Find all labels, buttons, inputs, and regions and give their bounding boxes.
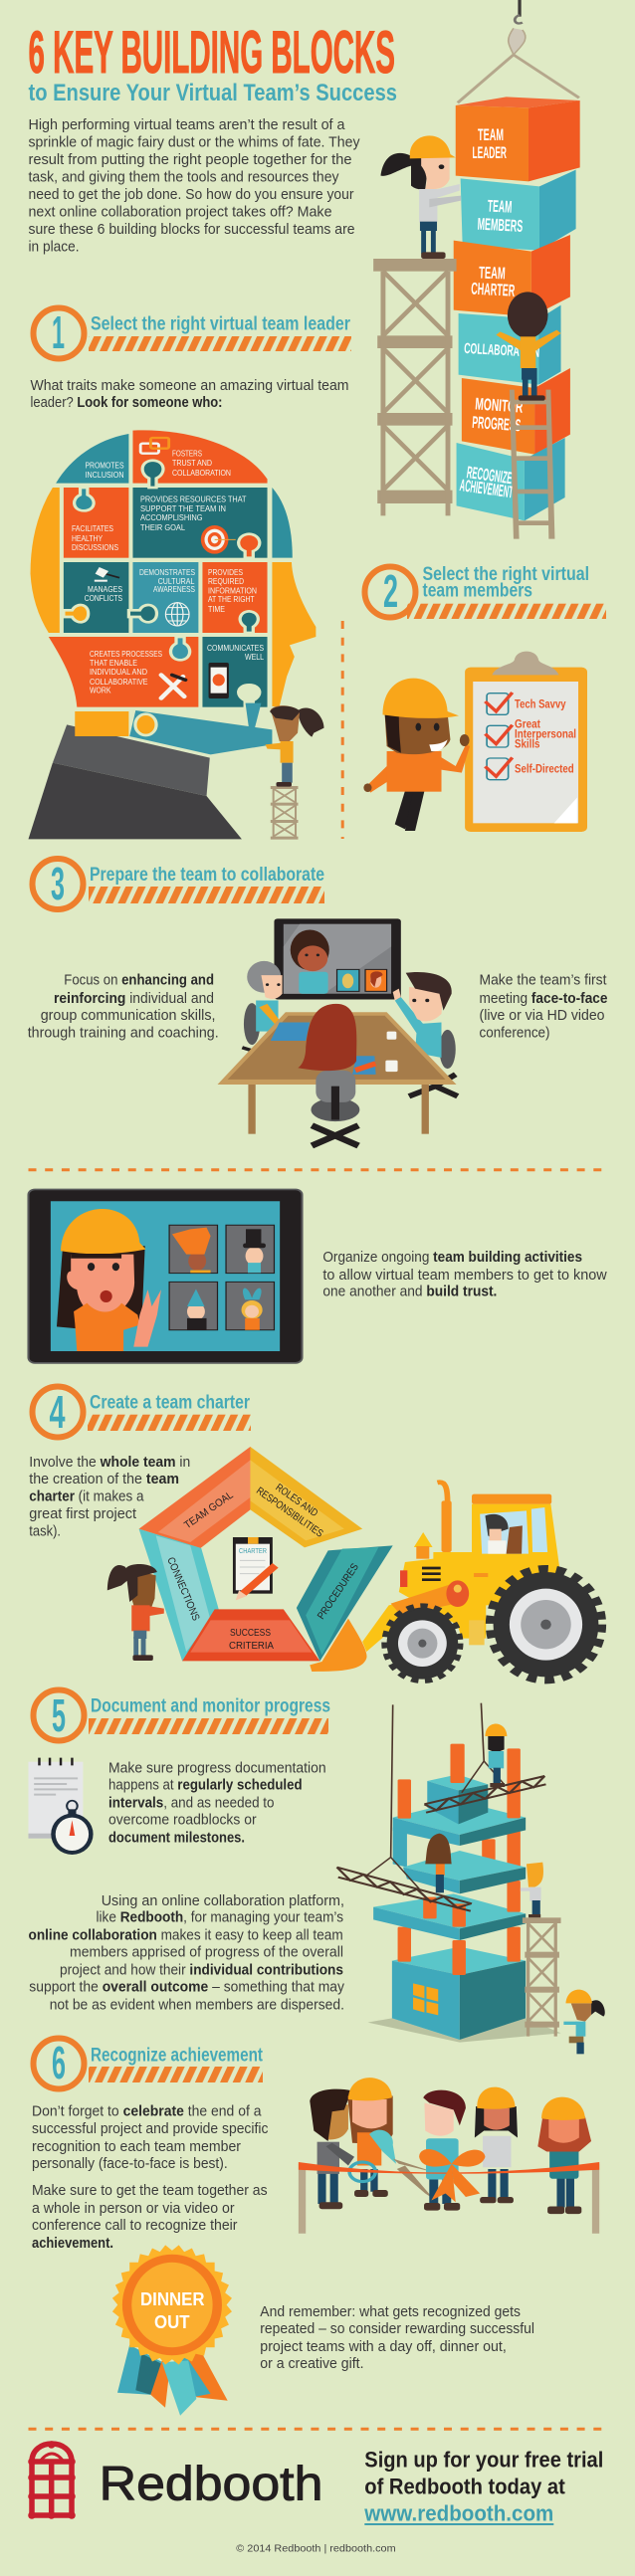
head puzzle labels: FOSTERS — [172, 450, 202, 459]
section 6 text: achievement. — [32, 2236, 113, 2252]
thumbnail: jester — [169, 1225, 217, 1274]
section 3 left text: reinforcing individual and — [54, 991, 214, 1007]
block labels: CHARTER — [471, 280, 516, 300]
call to action: www.redbooth.com — [363, 2501, 553, 2526]
head puzzle labels: FACILITATES — [72, 524, 113, 533]
intro paragraph: High performing virtual teams aren’t the result of a — [28, 117, 345, 133]
puzzle piece: yellow face — [272, 562, 316, 706]
team building text — [322, 1250, 607, 1300]
puzzle piece: facilitates — [64, 488, 128, 558]
section 5 heading — [34, 1689, 330, 1741]
section 3 right text: conference) — [480, 1026, 549, 1042]
subtitle: to Ensure Your Virtual Team’s Success — [28, 80, 397, 106]
pentagon labels: SUCCESS — [230, 1627, 271, 1639]
meeting scene — [217, 918, 458, 1145]
section 6 heading: Recognize achievement — [91, 2046, 264, 2066]
section 1 heading: Select the right virtual team leader — [91, 314, 350, 335]
section 5 text two: support the overall outcome – something that may — [29, 1980, 345, 1996]
head puzzle labels: INFORMATION — [208, 586, 257, 595]
segment: success criteria — [182, 1609, 319, 1661]
icon: dinner out medal: OUT — [154, 2312, 189, 2332]
section 3 right text: (live or via HD video — [480, 1008, 605, 1024]
block labels: ACHIEVEMENT — [459, 476, 515, 501]
closing text: project teams with a day off, dinner out, — [260, 2339, 507, 2355]
head puzzle labels: WORK — [90, 687, 111, 695]
conference table — [217, 1012, 457, 1134]
head puzzle labels: REQUIRED — [208, 577, 244, 586]
icon: gavel — [95, 567, 119, 582]
intro paragraph: in place. — [28, 240, 80, 256]
clipboard with traits — [363, 652, 587, 832]
tablet frame — [28, 1189, 303, 1363]
icon: dinner out medal: DINNER — [140, 2289, 205, 2309]
section 3 heading — [32, 858, 324, 909]
head puzzle labels: COMMUNICATES — [207, 644, 264, 653]
person with maroon hair — [423, 2090, 466, 2211]
head puzzle labels: INDIVIDUAL AND — [90, 668, 147, 677]
top columns and cube — [398, 1744, 521, 1824]
person with dark hair — [310, 2089, 354, 2209]
copyright: © 2014 Redbooth | redbooth.com — [236, 2543, 396, 2555]
section 2 heading: team members — [422, 580, 532, 601]
puzzle piece: communicates — [202, 637, 268, 707]
ground shadow — [367, 2018, 561, 2043]
section 5 text two: online collaboration makes it easy to keep all team — [28, 1928, 343, 1944]
closing text: or a creative gift. — [260, 2356, 364, 2372]
section 3 right text: Make the team’s first — [480, 973, 607, 989]
puzzle piece: manages conflicts — [64, 562, 128, 633]
intro paragraph: result from putting the right people together for the — [28, 152, 351, 168]
section 5 text one: document milestones. — [108, 1830, 245, 1846]
climbing worker — [496, 292, 561, 401]
head puzzle labels: DEMONSTRATES — [139, 568, 195, 577]
puzzle piece: fosters trust — [132, 430, 268, 484]
block labels: COLLABORATION — [464, 340, 540, 361]
section 5 text one: intervals, and as needed to — [108, 1796, 275, 1812]
head puzzle labels: INCLUSION — [86, 471, 124, 480]
section 5 text one: happens at regularly scheduled — [108, 1778, 303, 1794]
section 2 heading: 2 — [383, 565, 398, 617]
medal ribbons — [117, 2345, 228, 2416]
section 6 heading — [34, 2037, 264, 2089]
head puzzle labels: PROVIDES RESOURCES THAT — [140, 495, 247, 504]
crane cables — [366, 1703, 505, 1888]
scaffold beside tower — [373, 259, 457, 515]
section 5 text one: Make sure progress documentation — [108, 1761, 326, 1777]
section 6 heading: 6 — [52, 2037, 66, 2088]
section 5 text two: members apprised of progress of the overall — [70, 1945, 343, 1961]
segment: procedures — [297, 1545, 393, 1661]
head puzzle labels: AT THE RIGHT — [208, 595, 255, 604]
section 5 text one: overcome roadblocks or — [108, 1813, 257, 1829]
section 4 text — [29, 1455, 190, 1540]
section 5 heading: Document and monitor progress — [91, 1696, 330, 1717]
right blond worker — [521, 1863, 543, 1917]
segment: team goal — [139, 1447, 250, 1548]
block labels — [459, 125, 540, 501]
section 3 right text — [480, 973, 607, 1042]
checklist labels: Self-Directed — [515, 764, 574, 776]
front wheel — [385, 1606, 460, 1681]
block: team charter — [454, 235, 570, 316]
block labels: RECOGNIZE — [466, 463, 514, 488]
block labels: LEADER — [472, 143, 507, 162]
section 6 text: Don’t forget to celebrate the end of a — [32, 2103, 262, 2119]
worker pointing at clipboard — [363, 679, 470, 831]
middle worker — [425, 1834, 452, 1892]
block labels: TEAM — [478, 125, 504, 144]
lower steel truss — [337, 1868, 472, 1911]
section 4 text: Involve the whole team in — [29, 1455, 190, 1471]
team building text: to allow virtual team members to get to know — [322, 1268, 607, 1284]
top steel truss — [424, 1776, 545, 1813]
coffee mugs — [385, 1032, 398, 1072]
puzzle piece: required information — [202, 562, 268, 633]
head puzzle labels — [72, 450, 264, 695]
section 3 heading: Prepare the team to collaborate — [90, 865, 324, 886]
person with red hair — [537, 2097, 591, 2214]
pentagon labels: RESPONSIBILITIES — [254, 1485, 325, 1540]
thumbnail: top hat — [226, 1225, 274, 1274]
rear wheel — [490, 1569, 602, 1681]
call to action: of Redbooth today at — [364, 2475, 565, 2499]
block: team leader — [456, 97, 580, 181]
person with hat holding scissors — [347, 2078, 435, 2199]
block: monitor progress — [462, 368, 570, 455]
head puzzle labels: HEALTHY — [72, 534, 103, 543]
ladder — [510, 390, 554, 539]
section 4 text: great first project — [29, 1506, 136, 1522]
call to action: Sign up for your free trial — [364, 2447, 603, 2472]
checklist labels: Tech Savvy — [515, 699, 566, 711]
small worker on mini scaffold — [266, 705, 324, 840]
medal starburst — [112, 2245, 232, 2365]
section 3 right text: meeting face-to-face — [480, 991, 607, 1007]
checklist labels — [515, 699, 576, 776]
section 6 text: conference call to recognize their — [32, 2218, 238, 2234]
block labels: PROGRESS — [472, 413, 522, 435]
checkboxes — [485, 693, 513, 780]
ribbon cutting team — [299, 2078, 599, 2234]
left colleague — [242, 961, 284, 1051]
right colleague — [393, 972, 458, 1096]
thumbnail: party hat — [169, 1282, 217, 1330]
intro paragraph: sprinkle of magic fairy dust or the whims of fate. They — [28, 134, 360, 150]
head puzzle labels: DISCUSSIONS — [72, 543, 118, 552]
colleague seen from behind — [298, 1004, 376, 1145]
icon: crane hook and ropes — [458, 0, 579, 102]
head puzzle labels: PROVIDES — [208, 568, 243, 577]
icon: globe — [165, 603, 189, 626]
closing text — [260, 2304, 534, 2372]
puzzle piece: right teal — [272, 488, 293, 558]
section 5 text two — [28, 1893, 345, 2014]
block tower with crane hook, scaffold and workers — [373, 0, 580, 539]
second floor columns — [423, 1831, 521, 1927]
head puzzle labels: ACCOMPLISHING — [140, 513, 203, 522]
puzzle piece: provides resources — [132, 488, 268, 558]
video monitor — [274, 918, 401, 999]
first floor slab — [373, 1893, 526, 1940]
section 6 text: successful project and provide specific — [32, 2121, 268, 2137]
head puzzle labels: WELL — [245, 653, 264, 662]
head puzzle labels: PROMOTES — [86, 462, 124, 471]
section 5 heading: 5 — [52, 1689, 66, 1741]
section 2 heading — [364, 564, 606, 619]
head puzzle labels: COLLABORATIVE — [90, 678, 148, 687]
shoulders — [28, 724, 242, 839]
worker with clipboard at base — [563, 1990, 605, 2054]
puzzle piece: creates processes — [49, 637, 198, 707]
section 6 text — [32, 2103, 268, 2252]
puzzle piece: promotes inclusion — [56, 434, 128, 484]
head puzzle labels: MANAGES — [88, 585, 122, 594]
section 3 left text — [28, 973, 219, 1042]
pentagon labels: CHARTER — [239, 1548, 267, 1555]
head puzzle labels: TRUST AND — [172, 459, 212, 468]
charter clipboard with pencil — [233, 1537, 276, 1600]
section 4 text: charter (it makes a — [29, 1489, 144, 1505]
head puzzle labels: CULTURAL — [158, 577, 195, 586]
block labels: MEMBERS — [477, 215, 524, 236]
charter pentagon diagram — [107, 1447, 602, 1681]
checklist labels: Great — [515, 719, 540, 731]
block: recognize achievement — [457, 438, 565, 520]
head puzzle labels: SUPPORT THE TEAM IN — [140, 504, 226, 513]
thumbnail: bunny ears — [226, 1282, 274, 1330]
head puzzle labels: AWARENESS — [153, 585, 195, 594]
closing text: repeated – so consider rewarding successful — [260, 2321, 534, 2337]
base box — [392, 1947, 526, 2040]
section 2 heading: Select the right virtual — [422, 564, 589, 585]
intro paragraph: next online collaboration project takes off? Make — [28, 205, 332, 221]
section 5 text two: project and how their individual contributions — [60, 1963, 343, 1979]
section 6 text: a whole in person or via video or — [32, 2201, 235, 2217]
section 3 left text: through training and coaching. — [28, 1026, 219, 1042]
section 1 heading — [34, 306, 351, 358]
section 5 text two: Using an online collaboration platform, — [102, 1893, 344, 1909]
pentagon labels: CONNECTIONS — [164, 1555, 202, 1623]
closing text: And remember: what gets recognized gets — [260, 2304, 521, 2320]
pentagon labels: TEAM GOAL — [182, 1489, 236, 1531]
intro paragraph: sure these 6 building blocks for successful teams are — [28, 222, 354, 238]
section 5 text one — [108, 1761, 326, 1846]
section 3 left text: group communication skills, — [41, 1008, 216, 1024]
neck and arm pieces — [75, 710, 272, 754]
section 6 text: personally (face-to-face is best). — [32, 2156, 228, 2172]
window — [413, 1983, 438, 2015]
icon: target — [201, 525, 236, 554]
section 4 heading: Create a team charter — [90, 1393, 250, 1414]
section 4 heading — [32, 1386, 251, 1438]
worker with ponytail on scaffold — [380, 135, 461, 259]
tablet screen — [51, 1201, 280, 1351]
clipboard body — [465, 652, 587, 832]
ribbon — [299, 2162, 599, 2174]
second floor slab — [393, 1828, 526, 1893]
building under construction — [337, 1703, 605, 2054]
third floor slab — [393, 1801, 526, 1846]
section 5 text two: like Redbooth, for managing your team’s — [96, 1910, 343, 1926]
head puzzle labels: COLLABORATION — [172, 469, 231, 478]
section 1 intro text: What traits make someone an amazing virtual team — [30, 378, 348, 394]
section 1 heading: 1 — [52, 306, 65, 358]
section 3 heading: 3 — [51, 858, 65, 909]
top worker — [485, 1723, 507, 1787]
redbooth wordmark: Redbooth — [100, 2459, 322, 2511]
section 4 text: the creation of the team — [29, 1472, 179, 1487]
head puzzle labels: THEIR GOAL — [140, 523, 185, 532]
section 3 left text: Focus on enhancing and — [64, 973, 214, 989]
block labels: TEAM — [487, 196, 513, 217]
section 1 intro text — [30, 378, 348, 411]
pentagon labels: CRITERIA — [229, 1640, 274, 1652]
section 6 text: Make sure to get the team together as — [32, 2183, 268, 2199]
icon: notepad and stopwatch — [28, 1758, 94, 1855]
checklist labels: Skills — [515, 739, 539, 751]
person with black hair — [475, 2087, 518, 2203]
section 4 text: task). — [29, 1524, 61, 1540]
girl pushing pentagon — [107, 1564, 164, 1661]
section 6 text: recognition to each team member — [32, 2139, 241, 2155]
segment: roles and responsibilities — [250, 1447, 362, 1547]
intro paragraph: need to get the job done. So how do you ensure your — [28, 187, 354, 203]
section 5 text two: not be as evident when members are dispersed. — [50, 1998, 344, 2014]
columns — [398, 1927, 521, 1975]
team building text: Organize ongoing team building activities — [322, 1250, 582, 1266]
head puzzle labels: CREATES PROCESSES — [90, 650, 162, 659]
icon: wrench and hammer — [161, 675, 185, 698]
pentagon labels — [164, 1482, 361, 1652]
intro paragraph — [28, 117, 360, 256]
puzzle piece: left yellow — [31, 488, 60, 633]
checklist labels: Interpersonal — [515, 729, 576, 741]
icon: overlapping squares — [140, 438, 169, 454]
puzzle piece: cultural awareness — [132, 562, 198, 633]
head puzzle labels: THAT ENABLE — [90, 659, 137, 668]
icon: dinner out medal — [112, 2245, 232, 2416]
right scaffold — [523, 1917, 561, 2037]
pentagon labels: ROLES AND — [273, 1482, 320, 1519]
call to action — [363, 2447, 603, 2526]
puzzle knobs — [64, 461, 260, 707]
block labels: TEAM — [479, 264, 506, 283]
large worker on screen — [57, 1209, 161, 1351]
icon: phone — [209, 663, 229, 698]
tablet with video call — [28, 1189, 303, 1363]
pentagon labels: PROCEDURES — [316, 1561, 361, 1622]
segment: connections — [139, 1529, 219, 1661]
block: team members — [461, 170, 576, 251]
intro paragraph: task, and giving them the tools and resources they — [28, 169, 339, 185]
bow — [419, 2149, 485, 2202]
section 4 heading: 4 — [50, 1386, 66, 1438]
icon: redbooth logo — [28, 2441, 76, 2519]
block labels: MONITOR — [475, 394, 524, 417]
head puzzle labels: CONFLICTS — [85, 594, 122, 603]
panel: head puzzle — [28, 430, 324, 840]
team building text: one another and build trust. — [322, 1285, 497, 1300]
block: collaboration — [459, 305, 561, 385]
bulldozer — [310, 1483, 602, 1681]
head puzzle labels: TIME — [208, 605, 225, 614]
section 1 intro text: leader? Look for someone who: — [30, 395, 222, 411]
posts — [299, 2164, 599, 2234]
